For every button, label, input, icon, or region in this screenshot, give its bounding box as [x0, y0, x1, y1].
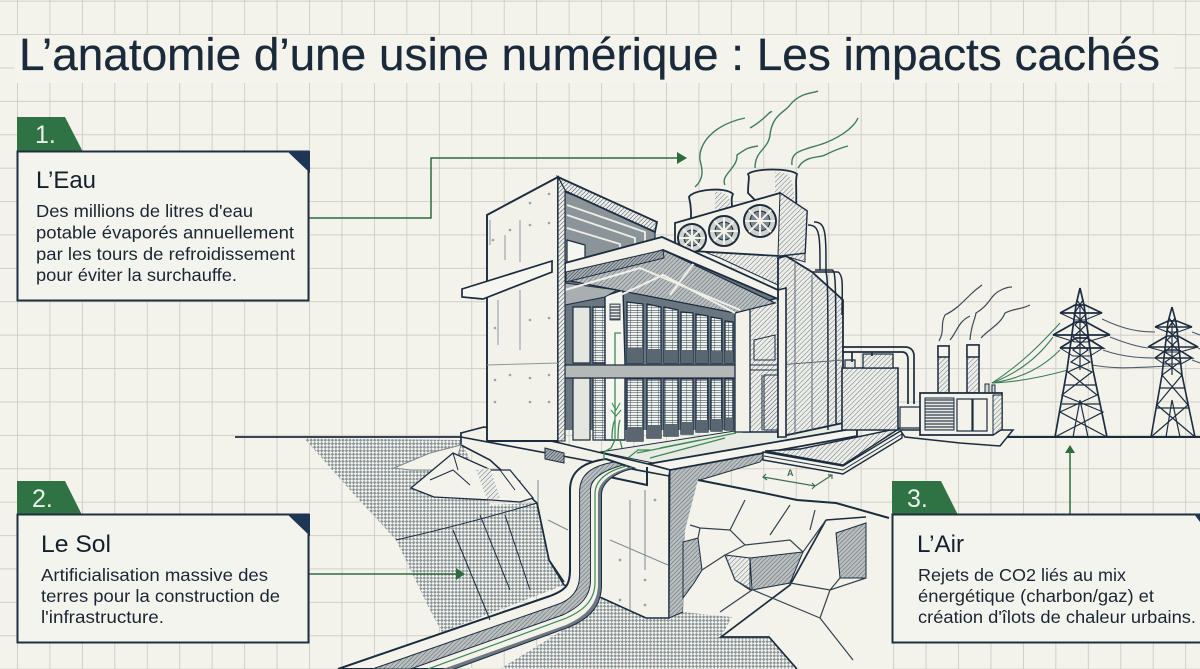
ledge — [462, 261, 552, 299]
tab 1 — [17, 117, 83, 152]
foundation — [461, 422, 857, 618]
generator — [920, 393, 1002, 435]
side room — [743, 298, 778, 432]
fan 1 — [678, 224, 706, 252]
wall pipes — [778, 222, 843, 435]
building — [462, 91, 858, 441]
block column hatch — [558, 177, 565, 441]
block frame — [558, 177, 657, 232]
right wall — [778, 256, 843, 437]
heading 1: L’Eau — [36, 167, 96, 194]
server racks upper row — [627, 302, 733, 363]
ceiling beams — [565, 255, 740, 313]
cooling tower 1 — [689, 190, 733, 228]
body 3: énergétique (charbon/gaz) et — [918, 586, 1154, 606]
body 2 — [41, 565, 280, 627]
tab 1: 1. — [35, 121, 56, 149]
chimney 1 — [938, 346, 949, 393]
fan 2 — [709, 216, 739, 246]
dimension arrows: A — [787, 468, 794, 478]
panel: Le Sol — [17, 481, 310, 642]
box 3 — [892, 514, 1200, 642]
front wall pillar — [778, 288, 786, 437]
body 1: potable évaporés annuellement — [36, 222, 294, 242]
green floor cooling lines — [604, 420, 736, 460]
roof truss — [566, 250, 664, 282]
connection pipes — [842, 347, 914, 404]
hatched soil: left — [304, 438, 564, 632]
pipe green line — [428, 466, 627, 669]
cooling unit — [675, 193, 807, 256]
power block — [842, 285, 1030, 446]
body 3: Rejets de CO2 liés au mix — [918, 565, 1126, 585]
frame below cooling unit — [705, 252, 805, 285]
box 2 — [18, 514, 308, 642]
arrow: soil connector — [309, 568, 465, 580]
panel: L'Air — [892, 481, 1200, 642]
corner 2 — [287, 514, 310, 536]
deck left — [461, 427, 670, 476]
arrow: water connector — [309, 152, 687, 218]
interior background — [565, 250, 778, 430]
power lines — [992, 319, 1200, 383]
title: L’anatomie d’une usine numérique : Les impacts cachés — [19, 29, 1160, 80]
tab 3 — [892, 481, 958, 515]
generator base — [900, 430, 1013, 446]
dimension arrows — [763, 468, 832, 489]
floor deck — [600, 422, 857, 463]
tab 3: 3. — [907, 485, 928, 513]
body 2: terres pour la construction de — [41, 586, 280, 606]
ceiling underside — [565, 250, 775, 313]
body 1 — [36, 201, 295, 285]
cable notch right — [600, 467, 647, 485]
lower back cabinets — [573, 378, 590, 440]
pipe bundle — [338, 459, 633, 669]
arrow: air connector — [1065, 445, 1075, 514]
foundation front wall — [461, 433, 669, 618]
body 3: création d'îlots de chaleur urbains. — [918, 607, 1196, 627]
tanks — [842, 368, 898, 430]
smoke: power plant — [939, 285, 1030, 341]
hatched soil: lower — [500, 598, 797, 669]
upper back cabinets — [573, 307, 590, 363]
heading 2: Le Sol — [41, 531, 111, 558]
corner 3 — [1194, 514, 1200, 522]
corner 1 — [287, 151, 310, 173]
panel: L'Eau — [17, 117, 310, 300]
body 1: Des millions de litres d'eau — [36, 201, 253, 221]
roof slab — [565, 237, 778, 299]
deck band — [648, 428, 857, 470]
ceiling left beams — [565, 283, 617, 305]
pipe band grey 2 — [443, 467, 633, 669]
cooling cabinet — [605, 290, 625, 440]
server racks lower row — [627, 379, 733, 441]
rock: right cliff — [683, 480, 892, 669]
tab 2: 2. — [32, 485, 53, 513]
pylon 1 — [1053, 288, 1110, 437]
box 1 — [18, 152, 308, 300]
foundation shaded side — [669, 452, 767, 618]
generator wires — [992, 323, 1068, 383]
concrete block — [487, 177, 558, 441]
upper opening — [565, 192, 655, 277]
ground line: right — [1000, 436, 1200, 438]
smoke: cooling towers — [695, 91, 858, 187]
fan 3 — [744, 205, 776, 237]
body 1: par les tours de refroidissement — [36, 244, 295, 264]
transmission wires — [1092, 319, 1200, 368]
body 1: pour éviter la surchauffe. — [36, 265, 237, 285]
cooling tower 2 — [748, 170, 797, 210]
right platform — [763, 428, 902, 474]
floor beam — [565, 365, 740, 378]
cable notch left — [545, 448, 564, 463]
pipes — [338, 459, 633, 669]
pylon 2 — [1148, 307, 1198, 437]
pipe band grey 1 — [372, 462, 623, 669]
column — [735, 308, 750, 432]
body 3 — [918, 565, 1196, 627]
upper window — [567, 240, 585, 268]
tab 2 — [17, 481, 82, 515]
body 2: l'infrastructure. — [41, 607, 164, 627]
body 2: Artificialisation massive des — [41, 565, 268, 585]
ground line: left — [235, 436, 462, 438]
heading 3: L’Air — [917, 531, 964, 558]
rock: upper left — [394, 445, 564, 620]
chimney 2 — [967, 345, 979, 393]
